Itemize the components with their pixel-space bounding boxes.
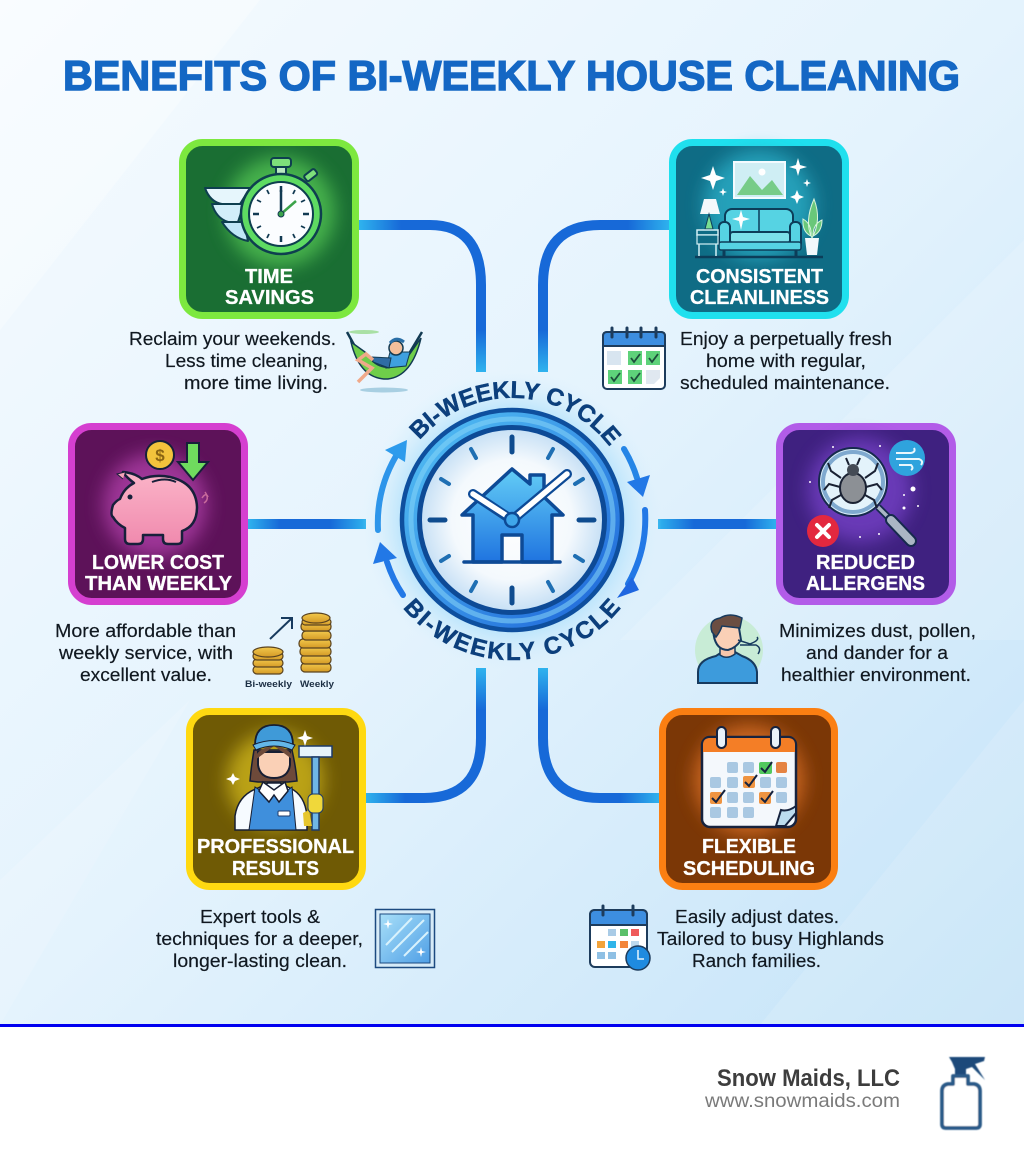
text: consistent cleanliness: Enjoy a perpetually fresh [680,328,892,349]
icon: hammock [347,330,422,392]
heading: reduced allergens: ALLERGENS [806,573,925,595]
text: flexible scheduling: Ranch families. [692,950,821,971]
icon: person breathing [695,615,763,684]
house icon [462,469,563,562]
heading: flexible scheduling: SCHEDULING [683,858,815,880]
cycle label top: BI-WEEKLY CYCLE [408,381,622,446]
icon: coin stacks comparison: Bi-weekly [245,679,293,690]
heading: consistent cleanliness: CLEANLINESS [690,287,829,309]
text: consistent cleanliness [680,328,892,393]
connector lines [248,220,777,803]
panel: lower cost than weekly [72,426,244,602]
cycle arrows [373,440,650,598]
icon: living room [695,158,823,257]
panel: reduced allergens [780,426,952,602]
heading: time savings: SAVINGS [225,287,314,309]
heading: flexible scheduling [683,836,815,880]
panel: professional results [190,712,362,886]
text: professional results [156,906,363,971]
text: lower cost: More affordable than [55,620,236,641]
text: time savings: more time living. [184,372,328,393]
text: lower cost: weekly service, with [58,642,233,663]
icon: calendar with checks [702,727,796,827]
text: consistent cleanliness: home with regular, [706,350,866,371]
heading: reduced allergens [806,552,925,595]
heading: consistent cleanliness [690,266,829,309]
icon: piggy bank with coin [112,441,208,544]
panel: time savings [182,142,356,316]
text: reduced allergens: healthier environment. [781,664,971,685]
text: professional results: techniques for a deeper, [156,928,363,949]
icon: checklist calendar [603,328,665,389]
clock ring [402,410,622,630]
clock ticks [430,437,594,603]
text: flexible scheduling: Easily adjust dates. [675,906,839,927]
text: professional results: longer-lasting clean. [173,950,347,971]
heading: reduced allergens: REDUCED [816,552,915,574]
text: time savings [129,328,336,393]
clock hands [473,474,567,527]
heading: time savings: TIME [245,266,293,288]
heading: lower cost [85,552,233,595]
icon: piggy bank with coin: $ [155,446,165,465]
text: professional results: Expert tools & [200,906,321,927]
text: lower cost: excellent value. [80,664,212,685]
icon: cleaner with squeegee [226,725,332,830]
icon: spray bottle [942,1057,985,1128]
central bi-weekly cycle clock [364,381,659,660]
icon: magnifier with dust mite [807,440,925,547]
text: reduced allergens: Minimizes dust, pollen, [779,620,976,641]
heading: time savings [225,266,314,309]
heading: consistent cleanliness: CONSISTENT [696,266,823,288]
icon: coin stacks comparison [245,613,335,690]
icon: coin stacks comparison: Weekly [300,679,335,690]
text: reduced allergens: and dander for a [806,642,949,663]
text: time savings: Less time cleaning, [165,350,328,371]
text: consistent cleanliness: scheduled maintenance. [680,372,890,393]
heading: flexible scheduling: FLEXIBLE [702,836,796,858]
text: reduced allergens [779,620,976,685]
heading: professional results: RESULTS [232,858,319,880]
text: lower cost [55,620,236,685]
icon: winged stopwatch [205,158,321,254]
text: flexible scheduling [657,906,884,971]
footer company name: Snow Maids, LLC [717,1065,900,1092]
heading: lower cost: THAN WEEKLY [85,573,233,595]
heading: professional results [197,836,354,880]
heading: professional results: PROFESSIONAL [197,836,354,858]
icon: calendar with clock [590,906,650,970]
icon: clean window [376,910,434,968]
panel: flexible scheduling [662,712,834,886]
heading: lower cost: LOWER COST [92,552,224,574]
text: time savings: Reclaim your weekends. [129,328,336,349]
cycle label bottom: BI-WEEKLY CYCLE [403,598,621,660]
text: flexible scheduling: Tailored to busy Highlands [657,928,884,949]
title: BENEFITS OF BI-WEEKLY HOUSE CLEANING [63,52,960,99]
footer band [0,1024,1024,1154]
panel: consistent cleanliness [672,142,846,316]
footer website: www.snowmaids.com [704,1090,900,1112]
